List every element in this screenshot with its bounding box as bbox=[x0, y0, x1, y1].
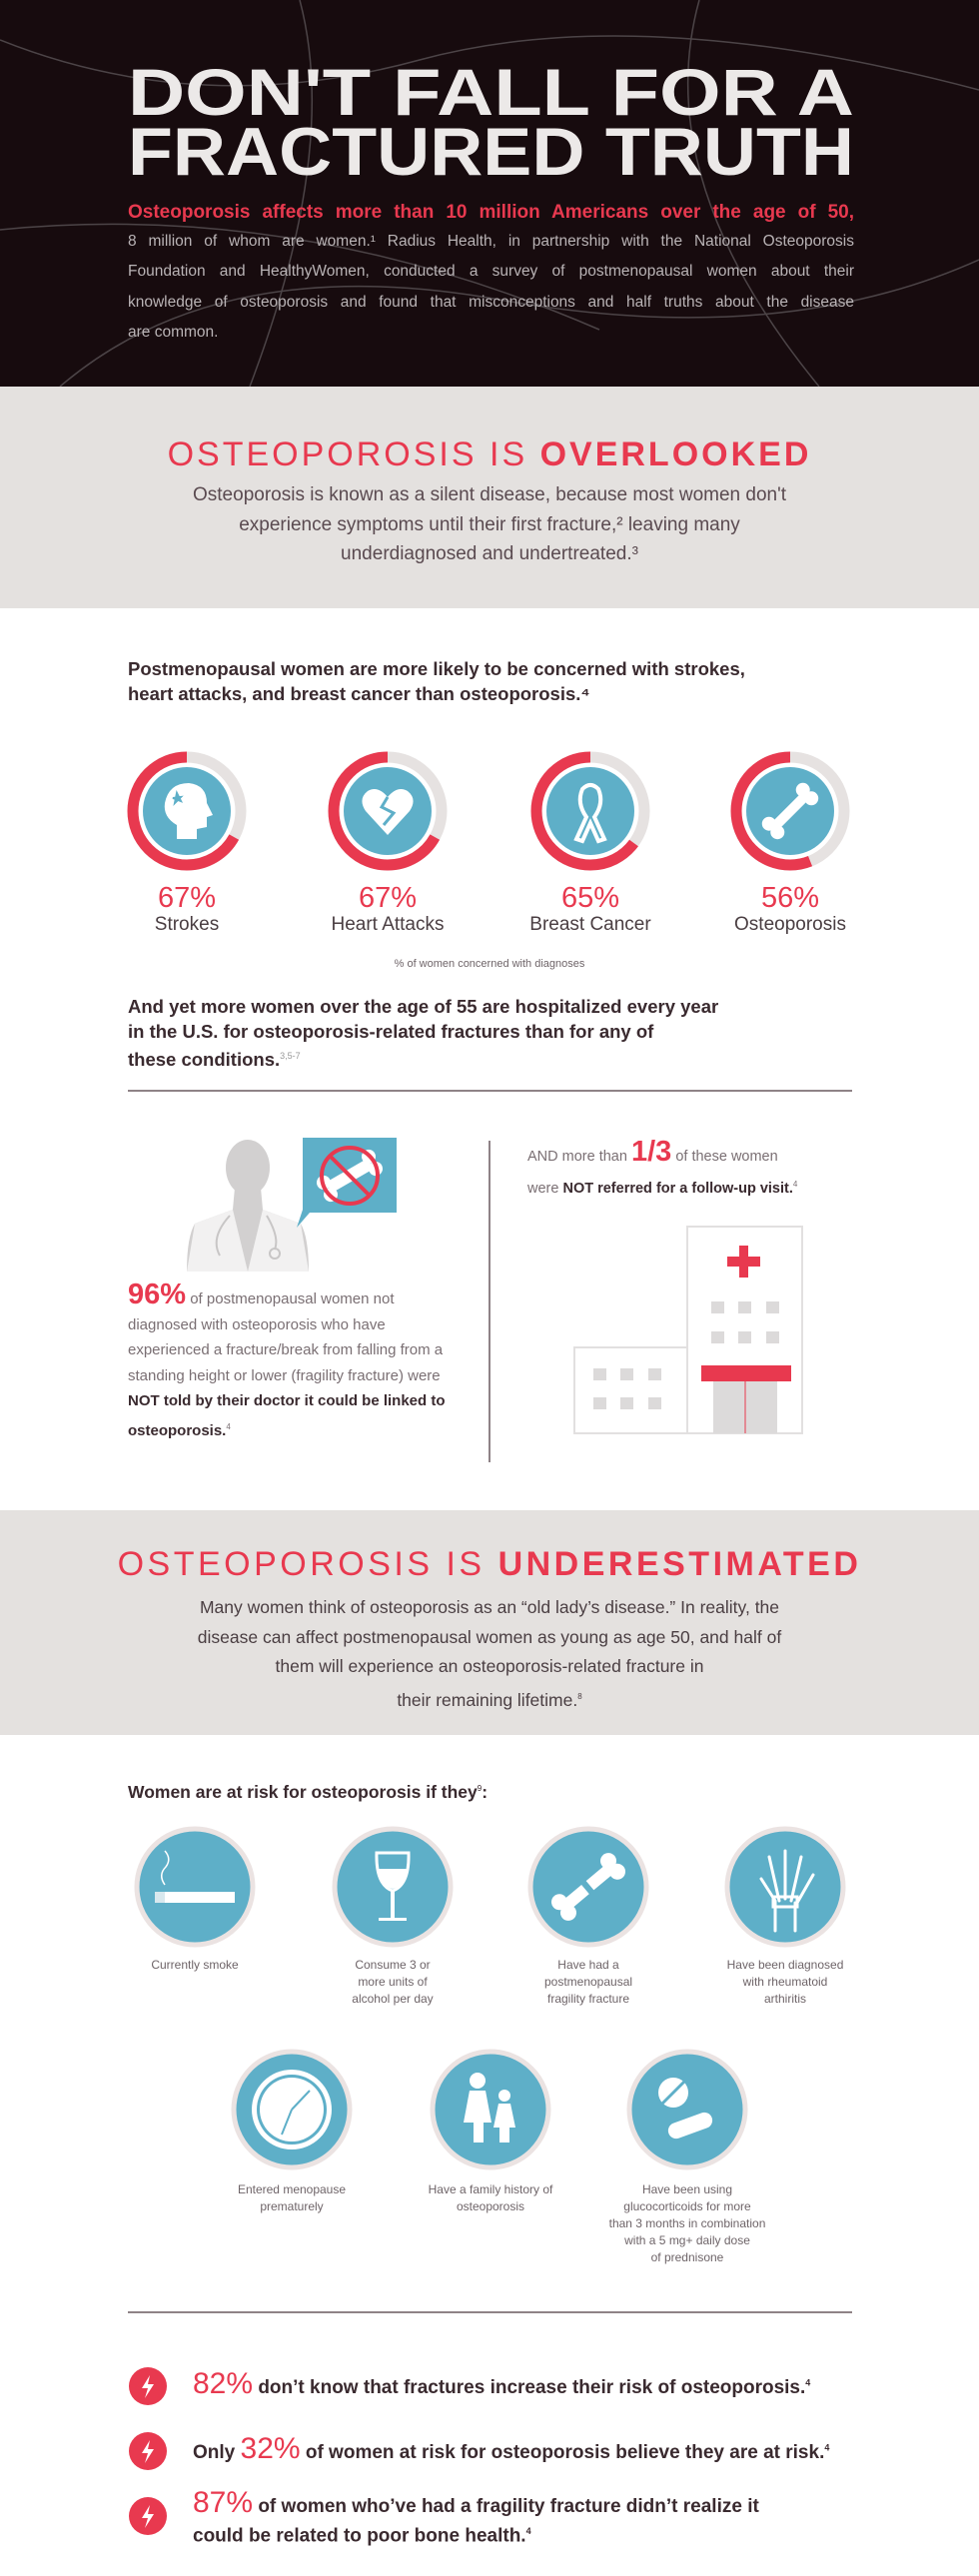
chart: concern rings: Strokes bbox=[155, 914, 219, 935]
icon grid: risk factors: Have been using bbox=[642, 2182, 732, 2196]
icon grid: risk factors: Have a family history of bbox=[429, 2182, 552, 2196]
icon grid: risk factors: with a 5 mg+ daily dose bbox=[624, 2233, 750, 2247]
text: hospitalized: these conditions.3,5-7 bbox=[128, 1049, 301, 1070]
intro text: Foundation and HealthyWomen, conducted a survey of postmenopausal women about their bbox=[128, 263, 854, 280]
panel: overlooked bbox=[0, 387, 979, 608]
icon: clock bbox=[252, 2070, 332, 2149]
stat: 82%: 82% don’t know that fractures increase their risk of osteoporosis.4 bbox=[193, 2367, 810, 2400]
text: their remaining lifetime.8 bbox=[397, 1689, 582, 1709]
text: 1/3 bbox=[527, 1136, 797, 1197]
text bbox=[198, 1597, 781, 1710]
icon grid: risk factors: glucocorticoids for more bbox=[623, 2199, 751, 2213]
stats list bbox=[129, 2367, 829, 2546]
text: 1/3: AND more than 1/3 of these women bbox=[527, 1136, 778, 1168]
title: FRACTURED TRUTH bbox=[128, 114, 854, 190]
text bbox=[193, 484, 786, 564]
intro text: knowledge of osteoporosis and found that misconceptions and half truths about the disease bbox=[128, 294, 854, 311]
stat: 87%: 87% of women who’ve had a fragility fracture didn’t realize it bbox=[193, 2486, 759, 2519]
icon grid: risk factors: with rheumatoid bbox=[743, 1975, 827, 1989]
text: disease can affect postmenopausal women as young as age 50, and half of bbox=[198, 1626, 781, 1646]
chart: concern rings: 67% bbox=[359, 882, 417, 914]
icon grid: risk factors: of prednisone bbox=[651, 2250, 723, 2264]
title: DON'T FALL FOR A bbox=[128, 55, 854, 129]
chart: concern rings: Osteoporosis bbox=[734, 914, 846, 935]
icon grid: risk factors: arthiritis bbox=[764, 1992, 806, 2006]
icon grid: risk factors: osteoporosis bbox=[457, 2199, 524, 2213]
icon: hospital bbox=[573, 1226, 803, 1434]
icon grid: risk factors: Consume 3 or bbox=[355, 1958, 431, 1972]
intro text: are common. bbox=[128, 324, 218, 341]
chart: concern rings: Heart Attacks bbox=[332, 914, 444, 935]
text: hospitalized bbox=[128, 996, 718, 1070]
heading: OSTEOPOROSIS IS OVERLOOKED bbox=[168, 435, 811, 473]
intro text bbox=[128, 202, 854, 341]
caption: % of women concerned with diagnoses bbox=[395, 958, 584, 970]
icon: doctor with bubble bbox=[187, 1138, 397, 1272]
heading: OSTEOPOROSIS IS UNDERESTIMATED bbox=[118, 1545, 861, 1583]
ring: bone bbox=[736, 757, 844, 865]
text: underdiagnosed and undertreated.³ bbox=[341, 543, 638, 564]
icon grid: risk factors bbox=[134, 1826, 845, 2264]
icon: wine glass bbox=[377, 1853, 409, 1921]
text: them will experience an osteoporosis-related fracture in bbox=[276, 1656, 703, 1676]
icon grid: risk factors: prematurely bbox=[260, 2199, 324, 2213]
panel: underestimated bbox=[0, 1510, 979, 1735]
intro statement bbox=[128, 658, 745, 704]
ring: ribbon bbox=[536, 757, 644, 865]
icon grid: risk factors: Have been diagnosed bbox=[727, 1958, 843, 1972]
icon grid: risk factors: Currently smoke bbox=[151, 1958, 239, 1972]
chart: concern rings bbox=[128, 751, 849, 970]
icon grid: risk factors: alcohol per day bbox=[352, 1992, 434, 2006]
icon: cigarette bbox=[155, 1851, 235, 1903]
text: 1/3: were NOT referred for a follow-up visit.4 bbox=[527, 1180, 797, 1197]
chart: concern rings: 67% bbox=[158, 882, 216, 914]
intro statement: heart attacks, and breast cancer than osteoporosis.⁴ bbox=[128, 683, 590, 703]
text: hospitalized: And yet more women over the age of 55 are hospitalized every year bbox=[128, 996, 718, 1017]
stat: 87%: could be related to poor bone health.4 bbox=[193, 2525, 531, 2546]
icon grid: risk factors: Have had a bbox=[557, 1958, 619, 1972]
chart: concern rings: 56% bbox=[761, 882, 819, 914]
ring: heart bbox=[334, 757, 442, 865]
icon grid: risk factors: more units of bbox=[358, 1975, 428, 1989]
intro text: 8 million of whom are women.¹ Radius Health, in partnership with the National Osteoporosis bbox=[128, 233, 854, 250]
chart: concern rings: 65% bbox=[561, 882, 619, 914]
text: 96%: 96% of postmenopausal women not diagnosed with osteoporosis who have experienced a fracture/break from falling from a standing height or lower (fragility fracture) were NOT told by their doctor it could be linked to osteoporosis.4 bbox=[128, 1279, 446, 1438]
icon: family bbox=[464, 2073, 515, 2143]
intro statement: Postmenopausal women are more likely to be concerned with strokes, bbox=[128, 658, 745, 679]
icon: hand bbox=[761, 1851, 813, 1931]
icon: broken bone bbox=[548, 1850, 628, 1924]
chart: concern rings: Breast Cancer bbox=[529, 914, 651, 935]
heading: risk factors: Women are at risk for osteoporosis if they9: bbox=[128, 1782, 488, 1802]
header: dark banner bbox=[0, 0, 979, 387]
icon: pills bbox=[658, 2078, 714, 2141]
stat: 87% bbox=[129, 2486, 759, 2546]
text: experience symptoms until their first fracture,² leaving many bbox=[239, 513, 740, 535]
stat: 32%: Only 32% of women at risk for osteoporosis believe they are at risk.4 bbox=[193, 2432, 829, 2465]
icon grid: risk factors: fragility fracture bbox=[547, 1992, 629, 2006]
icon grid: risk factors: Entered menopause bbox=[238, 2182, 346, 2196]
text: hospitalized: in the U.S. for osteoporosis-related fractures than for any of bbox=[128, 1021, 653, 1041]
text: Many women think of osteoporosis as an “old lady’s disease.” In reality, the bbox=[200, 1597, 779, 1617]
ring: strokes bbox=[133, 757, 241, 865]
icon grid: risk factors: postmenopausal bbox=[544, 1975, 632, 1989]
title bbox=[128, 55, 854, 190]
text: Osteoporosis is known as a silent disease, because most women don't bbox=[193, 484, 786, 505]
icon grid: risk factors: than 3 months in combination bbox=[609, 2216, 765, 2230]
intro text: Osteoporosis affects more than 10 million Americans over the age of 50, bbox=[128, 202, 854, 223]
